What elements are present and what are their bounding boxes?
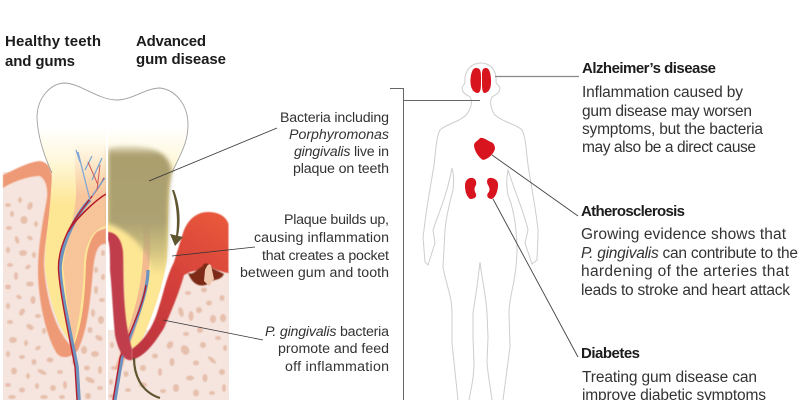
section: Atherosclerosis	[581, 203, 798, 299]
section: Atherosclerosis: P. gingivalis can contribute to the	[581, 245, 798, 262]
heading: healthy: and gums	[5, 53, 75, 70]
label: bacteria: gingivalis live in	[294, 144, 389, 160]
inflamed bone	[188, 263, 224, 286]
root and crown: diseased dentine	[108, 88, 188, 352]
section: Diabetes	[581, 345, 766, 400]
label: bacteria: Porphyromonas	[289, 127, 389, 143]
section: Atherosclerosis: leads to stroke and heart attack	[581, 282, 790, 299]
section: Diabetes: Diabetes	[581, 345, 640, 362]
section: Alzheimer's: gum disease may worsen	[582, 103, 752, 120]
section: Alzheimer's: symptoms, but the bacteria	[582, 121, 763, 138]
heading: healthy: Healthy teeth	[5, 33, 101, 50]
label: plaque: between gum and tooth	[240, 265, 389, 281]
illustration: tooth cross-section	[3, 83, 229, 400]
section: Alzheimer's	[582, 60, 763, 156]
label: inflammation: promote and feed	[278, 341, 389, 357]
leader lines: body	[390, 76, 579, 400]
label: inflammation: P. gingivalis bacteria	[265, 324, 389, 340]
bone fragment	[204, 264, 214, 286]
divider	[106, 146, 108, 400]
gum: inflamed	[132, 212, 228, 360]
label: inflammation: off inflammation	[285, 359, 389, 375]
pulp: healthy	[58, 142, 106, 400]
section: Atherosclerosis: Atherosclerosis	[581, 203, 685, 220]
section: Atherosclerosis: hardening of the arteries that	[581, 263, 790, 280]
label: bacteria: Bacteria including	[280, 110, 389, 126]
heading: healthy	[5, 33, 101, 70]
heading: advanced	[136, 33, 226, 68]
section: Alzheimer's: Inflammation caused by	[582, 84, 743, 101]
label: bacteria: plaque on teeth	[293, 161, 389, 177]
icon: heart	[474, 138, 495, 160]
section: Diabetes: Treating gum disease can	[582, 369, 757, 386]
label: plaque: causing inflammation	[254, 230, 389, 246]
plaque	[108, 146, 172, 276]
label: plaque: Plaque builds up,	[284, 212, 389, 228]
bone: healthy side	[3, 172, 106, 400]
inner gum: diseased	[108, 232, 132, 360]
label: plaque	[240, 212, 389, 281]
gum: healthy side	[3, 161, 106, 357]
body outline	[423, 63, 538, 400]
bone: diseased side	[108, 272, 229, 400]
label: bacteria	[280, 110, 389, 177]
label: plaque: that creates a pocket	[262, 248, 389, 264]
leader lines: tooth	[149, 128, 277, 340]
heading: advanced: Advanced	[136, 33, 206, 50]
icon: brain	[470, 68, 491, 93]
heading: advanced: gum disease	[136, 51, 226, 68]
root and crown: healthy dentine	[37, 83, 117, 345]
section: Alzheimer's: Alzheimer’s disease	[582, 60, 716, 77]
label: inflammation	[265, 324, 389, 375]
section: Atherosclerosis: Growing evidence shows that	[581, 226, 787, 243]
section: Alzheimer's: may also be a direct cause	[582, 139, 756, 156]
bone pores	[5, 197, 227, 399]
pulp: diseased	[113, 225, 148, 400]
arrow: plaque moves down	[170, 190, 183, 246]
icon: kidneys	[465, 178, 498, 199]
arrow: into bloodstream	[134, 358, 160, 398]
tooth outline	[37, 83, 188, 173]
